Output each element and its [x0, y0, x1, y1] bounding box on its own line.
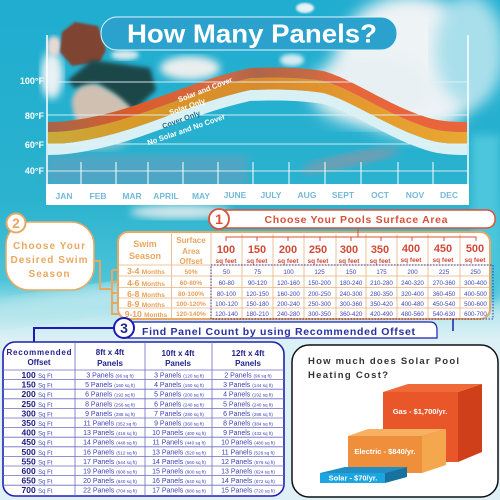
area values: 120-140: [215, 311, 238, 318]
area values: 270-360: [433, 280, 456, 287]
season rows: [125, 266, 168, 319]
area values: 540-630: [433, 311, 456, 318]
step 3 heading: Find Panel Count by using Recommended Offset: [142, 326, 416, 338]
column headings: Surface: [176, 236, 206, 245]
12ft column: 3 Panels (144 sq ft): [223, 382, 273, 389]
curve labels: No Solar and No Cover: [146, 112, 226, 147]
column headings: Panels: [235, 359, 261, 368]
10ft column: 15 Panels (600 sq ft): [152, 468, 206, 476]
8ft column: 8 Panels (256 sq ft): [85, 401, 135, 408]
column headings: Swim: [133, 239, 157, 249]
step 2 text: Choose Your: [13, 241, 85, 252]
8ft column: 6 Panels (192 sq ft): [85, 392, 135, 399]
10ft column: 6 Panels (240 sq ft): [154, 401, 204, 408]
12ft column: 13 Panels (624 sq ft): [221, 468, 275, 476]
area headings: 300: [340, 244, 358, 256]
8ft column: 19 Panels (608 sq ft): [83, 468, 137, 476]
gas block: [383, 384, 482, 462]
10ft column: 14 Panels (560 sq ft): [152, 459, 206, 466]
area values: 400-480: [401, 301, 424, 308]
area values: 400-500: [464, 291, 487, 298]
title: How Many Panels?: [127, 18, 377, 48]
12ft column: 12 Panels (576 sq ft): [221, 459, 275, 466]
12ft column: 5 Panels (240 sq ft): [223, 401, 273, 408]
area values: 250-300: [308, 301, 331, 308]
area values: 80-100: [217, 291, 237, 298]
offset column: 700 Sq Ft: [22, 485, 53, 495]
area headings: [217, 243, 484, 256]
area values: 300-350: [308, 311, 331, 318]
season rows: 3-4 Months: [127, 266, 165, 276]
column headings: Offset: [27, 358, 51, 367]
column headings: 12ft x 4ft: [232, 349, 265, 358]
12ft column: [221, 372, 275, 495]
10ft column: [152, 372, 206, 495]
area values: 600-700: [464, 311, 487, 318]
month labels: FEB: [90, 191, 106, 201]
electric block: [348, 429, 446, 473]
step 1 heading: [209, 209, 495, 229]
10ft column: 9 Panels (360 sq ft): [154, 420, 204, 428]
temperature labels: [20, 76, 45, 176]
12ft column: 10 Panels (480 sq ft): [221, 440, 275, 447]
column headings: Panels: [165, 359, 191, 368]
area values: 280-350: [370, 291, 393, 298]
8ft column: 11 Panels (352 sq ft): [83, 420, 137, 428]
area values: 360-420: [340, 311, 363, 318]
12ft column: 11 Panels (528 sq ft): [221, 449, 275, 456]
column headings: Area: [182, 247, 200, 256]
area values: 75: [254, 269, 261, 276]
area values: 50: [223, 269, 230, 276]
month labels: JUNE: [224, 190, 247, 200]
area values: 240-320: [401, 280, 424, 287]
step 1 heading: 1: [215, 211, 223, 227]
season rows: 9-10 Months: [125, 309, 168, 319]
area values: 125: [314, 269, 325, 276]
12ft column: 4 Panels (192 sq ft): [223, 392, 273, 399]
offset column: 400 Sq Ft: [22, 428, 53, 438]
area values: 150-180: [246, 301, 269, 308]
8ft column: [83, 372, 137, 495]
connector from step 2 to seasons: [94, 261, 119, 315]
grid lines: [47, 82, 468, 171]
offset column: 100 Sq Ft: [22, 370, 53, 380]
cost panel heading: How much does Solar Pool: [308, 356, 459, 367]
area headings: 450: [434, 243, 452, 255]
background water and foam: [0, 0, 500, 331]
area units: [216, 257, 486, 265]
area values: 150: [346, 269, 357, 276]
area units: sq feet: [339, 258, 360, 265]
curve band: no solar and no cover: [48, 89, 467, 155]
curve labels: [146, 75, 234, 147]
month labels: JAN: [55, 191, 73, 201]
area values: 320-400: [401, 291, 424, 298]
area values: 180-210: [246, 311, 269, 318]
offset values: 120-140%: [176, 311, 206, 318]
month labels: APRIL: [153, 191, 179, 201]
area headings: 250: [309, 244, 327, 256]
curve labels: Solar Only: [168, 96, 207, 117]
area headings: 350: [371, 244, 389, 256]
offset column: 200 Sq Ft: [22, 389, 53, 399]
temperature labels: 40°F: [25, 166, 45, 176]
area values: 200-240: [277, 301, 300, 308]
curve band: solar only: [48, 77, 467, 144]
panel count table: [3, 342, 284, 496]
temperature labels: 80°F: [25, 111, 45, 121]
column headings: 10ft x 4ft: [162, 349, 195, 358]
step 2 callout: [6, 214, 94, 290]
curve labels: Cover Only: [161, 108, 202, 131]
month labels: [55, 190, 458, 201]
area units: sq feet: [247, 258, 268, 265]
month labels: NOV: [406, 190, 425, 200]
surface area table: [118, 228, 493, 319]
area values: 200: [407, 269, 418, 276]
area headings: 200: [279, 244, 297, 256]
area values: 210-280: [370, 280, 393, 287]
column headings: Offset: [179, 257, 203, 266]
area units: sq feet: [278, 258, 299, 265]
temperature chart: [20, 35, 469, 205]
area values: 480-560: [401, 311, 424, 318]
temperature labels: 60°F: [25, 140, 45, 150]
month labels: MAR: [122, 191, 142, 201]
gas block: Gas - $1,700/yr.: [393, 407, 447, 416]
12ft column: 2 Panels (96 sq ft): [224, 372, 272, 380]
8ft column: 20 Panels (640 sq ft): [83, 478, 137, 485]
10ft column: 17 Panels (680 sq ft): [152, 488, 206, 495]
temperature labels: 100°F: [20, 76, 44, 86]
area values: 300-400: [464, 280, 487, 287]
table rules: [118, 232, 490, 319]
area values: 180-240: [340, 280, 363, 287]
area values: 150-200: [308, 280, 331, 287]
chart axes: [47, 35, 468, 205]
area values: 240-280: [277, 311, 300, 318]
cost panel heading: [308, 356, 459, 381]
12ft column: 8 Panels (384 sq ft): [223, 420, 273, 428]
month ticks: [81, 162, 433, 184]
table rules: [3, 342, 284, 496]
column headings: Recommended: [6, 348, 72, 357]
area units: sq feet: [308, 258, 329, 265]
curve band: solar and cover: [48, 67, 467, 132]
step 2 badge: 2: [12, 215, 20, 231]
area values: 160-200: [277, 291, 300, 298]
area values: 360-450: [433, 291, 456, 298]
area values: 225: [439, 269, 450, 276]
step 2 text: [10, 241, 88, 280]
area headings: 150: [248, 244, 266, 256]
offset column: 150 Sq Ft: [22, 380, 53, 390]
column headings: [6, 348, 265, 368]
10ft column: 3 Panels (120 sq ft): [154, 372, 204, 380]
offset column: 300 Sq Ft: [22, 408, 53, 418]
area values: 120-150: [246, 291, 269, 298]
cost panel: [292, 345, 498, 497]
area values: 450-540: [433, 301, 456, 308]
offset column: 500 Sq Ft: [22, 447, 53, 457]
offset column: 250 Sq Ft: [22, 399, 53, 409]
month labels: JULY: [261, 190, 282, 200]
8ft column: 5 Panels (160 sq ft): [85, 382, 135, 389]
cost panel heading: Heating Cost?: [308, 370, 388, 381]
curve labels: Solar and Cover: [177, 75, 234, 104]
area values: 200-250: [308, 291, 331, 298]
10ft column: 13 Panels (520 sq ft): [152, 449, 206, 456]
step 3 heading: [34, 318, 453, 342]
swimmer photo: [41, 22, 156, 150]
offset values: [176, 269, 206, 318]
12ft column: 6 Panels (288 sq ft): [223, 411, 273, 418]
8ft column: 22 Panels (704 sq ft): [83, 488, 137, 495]
area values: 100-120: [215, 301, 238, 308]
10ft column: 10 Panels (400 sq ft): [152, 430, 206, 437]
12ft column: 9 Panels (432 sq ft): [223, 430, 273, 437]
area values: 120-160: [277, 280, 300, 287]
season rows: 8-9 Months: [127, 299, 165, 309]
8ft column: 3 Panels (96 sq ft): [86, 372, 134, 380]
solar block: Solar - $70/yr.: [329, 474, 377, 482]
season rows: 6-8 Months: [127, 289, 165, 299]
8ft column: 14 Panels (448 sq ft): [83, 440, 137, 447]
solar block: [320, 467, 407, 483]
10ft column: 4 Panels (160 sq ft): [154, 382, 204, 389]
area values: 420-490: [370, 311, 393, 318]
area units: sq feet: [465, 257, 486, 264]
10ft column: 16 Panels (640 sq ft): [152, 478, 206, 485]
10ft column: 5 Panels (200 sq ft): [154, 392, 204, 399]
area values: [215, 269, 487, 318]
offset values: 60-80%: [180, 280, 202, 287]
month labels: MAY: [192, 191, 210, 201]
area values: 500-600: [464, 301, 487, 308]
area values: 100: [283, 269, 294, 276]
offset column: 450 Sq Ft: [22, 437, 53, 447]
area headings: 100: [217, 244, 235, 256]
step 1 heading: Choose Your Pools Surface Area: [264, 214, 448, 226]
step 2 text: Season: [28, 269, 70, 280]
column headings: [129, 236, 206, 266]
area values: 300-360: [340, 301, 363, 308]
offset column: [22, 370, 53, 495]
month band: [46, 184, 469, 205]
electric block: Electric - $840/yr.: [354, 447, 416, 456]
offset column: 550 Sq Ft: [22, 456, 53, 466]
area values: 175: [376, 269, 387, 276]
8ft column: 17 Panels (544 sq ft): [83, 459, 137, 466]
red bracket: [226, 228, 476, 241]
area units: sq feet: [216, 258, 237, 265]
8ft column: 13 Panels (416 sq ft): [83, 430, 137, 437]
offset values: 80-100%: [178, 291, 204, 298]
step 2 text: Desired Swim: [10, 255, 88, 266]
12ft column: 15 Panels (720 sq ft): [221, 488, 275, 495]
month labels: SEPT: [332, 190, 355, 200]
offset values: 100-120%: [176, 301, 206, 308]
month labels: AUG: [298, 190, 317, 200]
offset column: 650 Sq Ft: [22, 476, 53, 486]
area units: sq feet: [401, 257, 422, 264]
offset values: 50%: [184, 269, 198, 276]
10ft column: 7 Panels (280 sq ft): [154, 411, 204, 418]
8ft column: 16 Panels (512 sq ft): [83, 449, 137, 456]
area values: 90-120: [248, 280, 268, 287]
8ft column: 9 Panels (288 sq ft): [85, 411, 135, 418]
offset column: 600 Sq Ft: [22, 466, 53, 476]
10ft column: 11 Panels (440 sq ft): [152, 440, 206, 447]
area headings: 400: [402, 243, 420, 255]
month labels: OCT: [371, 190, 390, 200]
area units: sq feet: [370, 258, 391, 265]
12ft column: 14 Panels (672 sq ft): [221, 478, 275, 485]
area units: sq feet: [433, 257, 454, 264]
area headings: 500: [466, 243, 484, 255]
offset column: 350 Sq Ft: [22, 418, 53, 428]
column headings: Season: [129, 251, 161, 261]
column headings: 8ft x 4ft: [96, 348, 125, 357]
area values: 60-80: [219, 280, 235, 287]
season rows: 4-6 Months: [127, 278, 165, 288]
month labels: DEC: [440, 190, 458, 200]
dotted highlight: [211, 265, 493, 319]
area values: 350-420: [370, 301, 393, 308]
step 3 heading: 3: [120, 320, 128, 336]
area values: 250: [470, 269, 481, 276]
area values: 240-300: [340, 291, 363, 298]
column headings: Panels: [97, 359, 123, 368]
